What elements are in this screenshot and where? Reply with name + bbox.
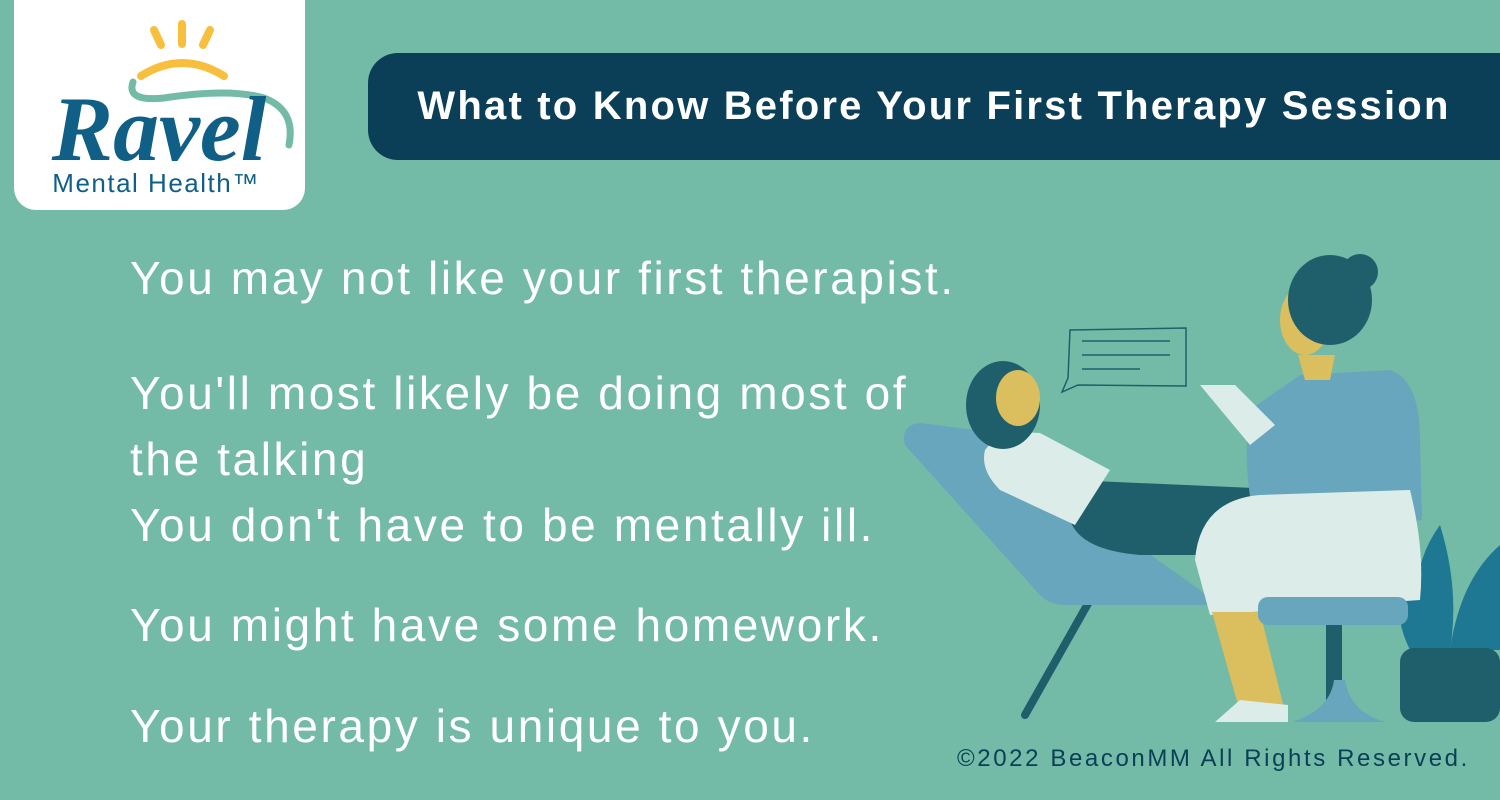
logo: Ravel	[51, 78, 267, 180]
text: point 5: Your therapy is unique to you.	[130, 700, 815, 752]
text: point 2: the talking	[130, 433, 368, 485]
stool	[1258, 597, 1408, 722]
logo: Mental Health™	[52, 168, 260, 198]
chair	[904, 423, 1215, 605]
text: point 2: You'll most likely be doing most of	[130, 367, 908, 419]
text: point 2	[130, 367, 908, 485]
title bar	[368, 53, 1500, 160]
pot	[1400, 648, 1500, 722]
chair leg	[1025, 600, 1090, 715]
title bar: What to Know Before Your First Therapy Session	[417, 84, 1451, 128]
speech bubble	[1062, 328, 1186, 392]
copyright: ©2022 BeaconMM All Rights Reserved.	[957, 745, 1470, 772]
text: point 4: You might have some homework.	[130, 599, 884, 651]
logo	[14, 0, 305, 210]
patient	[966, 361, 1300, 555]
therapist	[1195, 254, 1422, 722]
plant	[1399, 525, 1500, 650]
text: point 3: You don't have to be mentally ill.	[130, 499, 875, 551]
text: point 1: You may not like your first therapist.	[130, 252, 956, 304]
